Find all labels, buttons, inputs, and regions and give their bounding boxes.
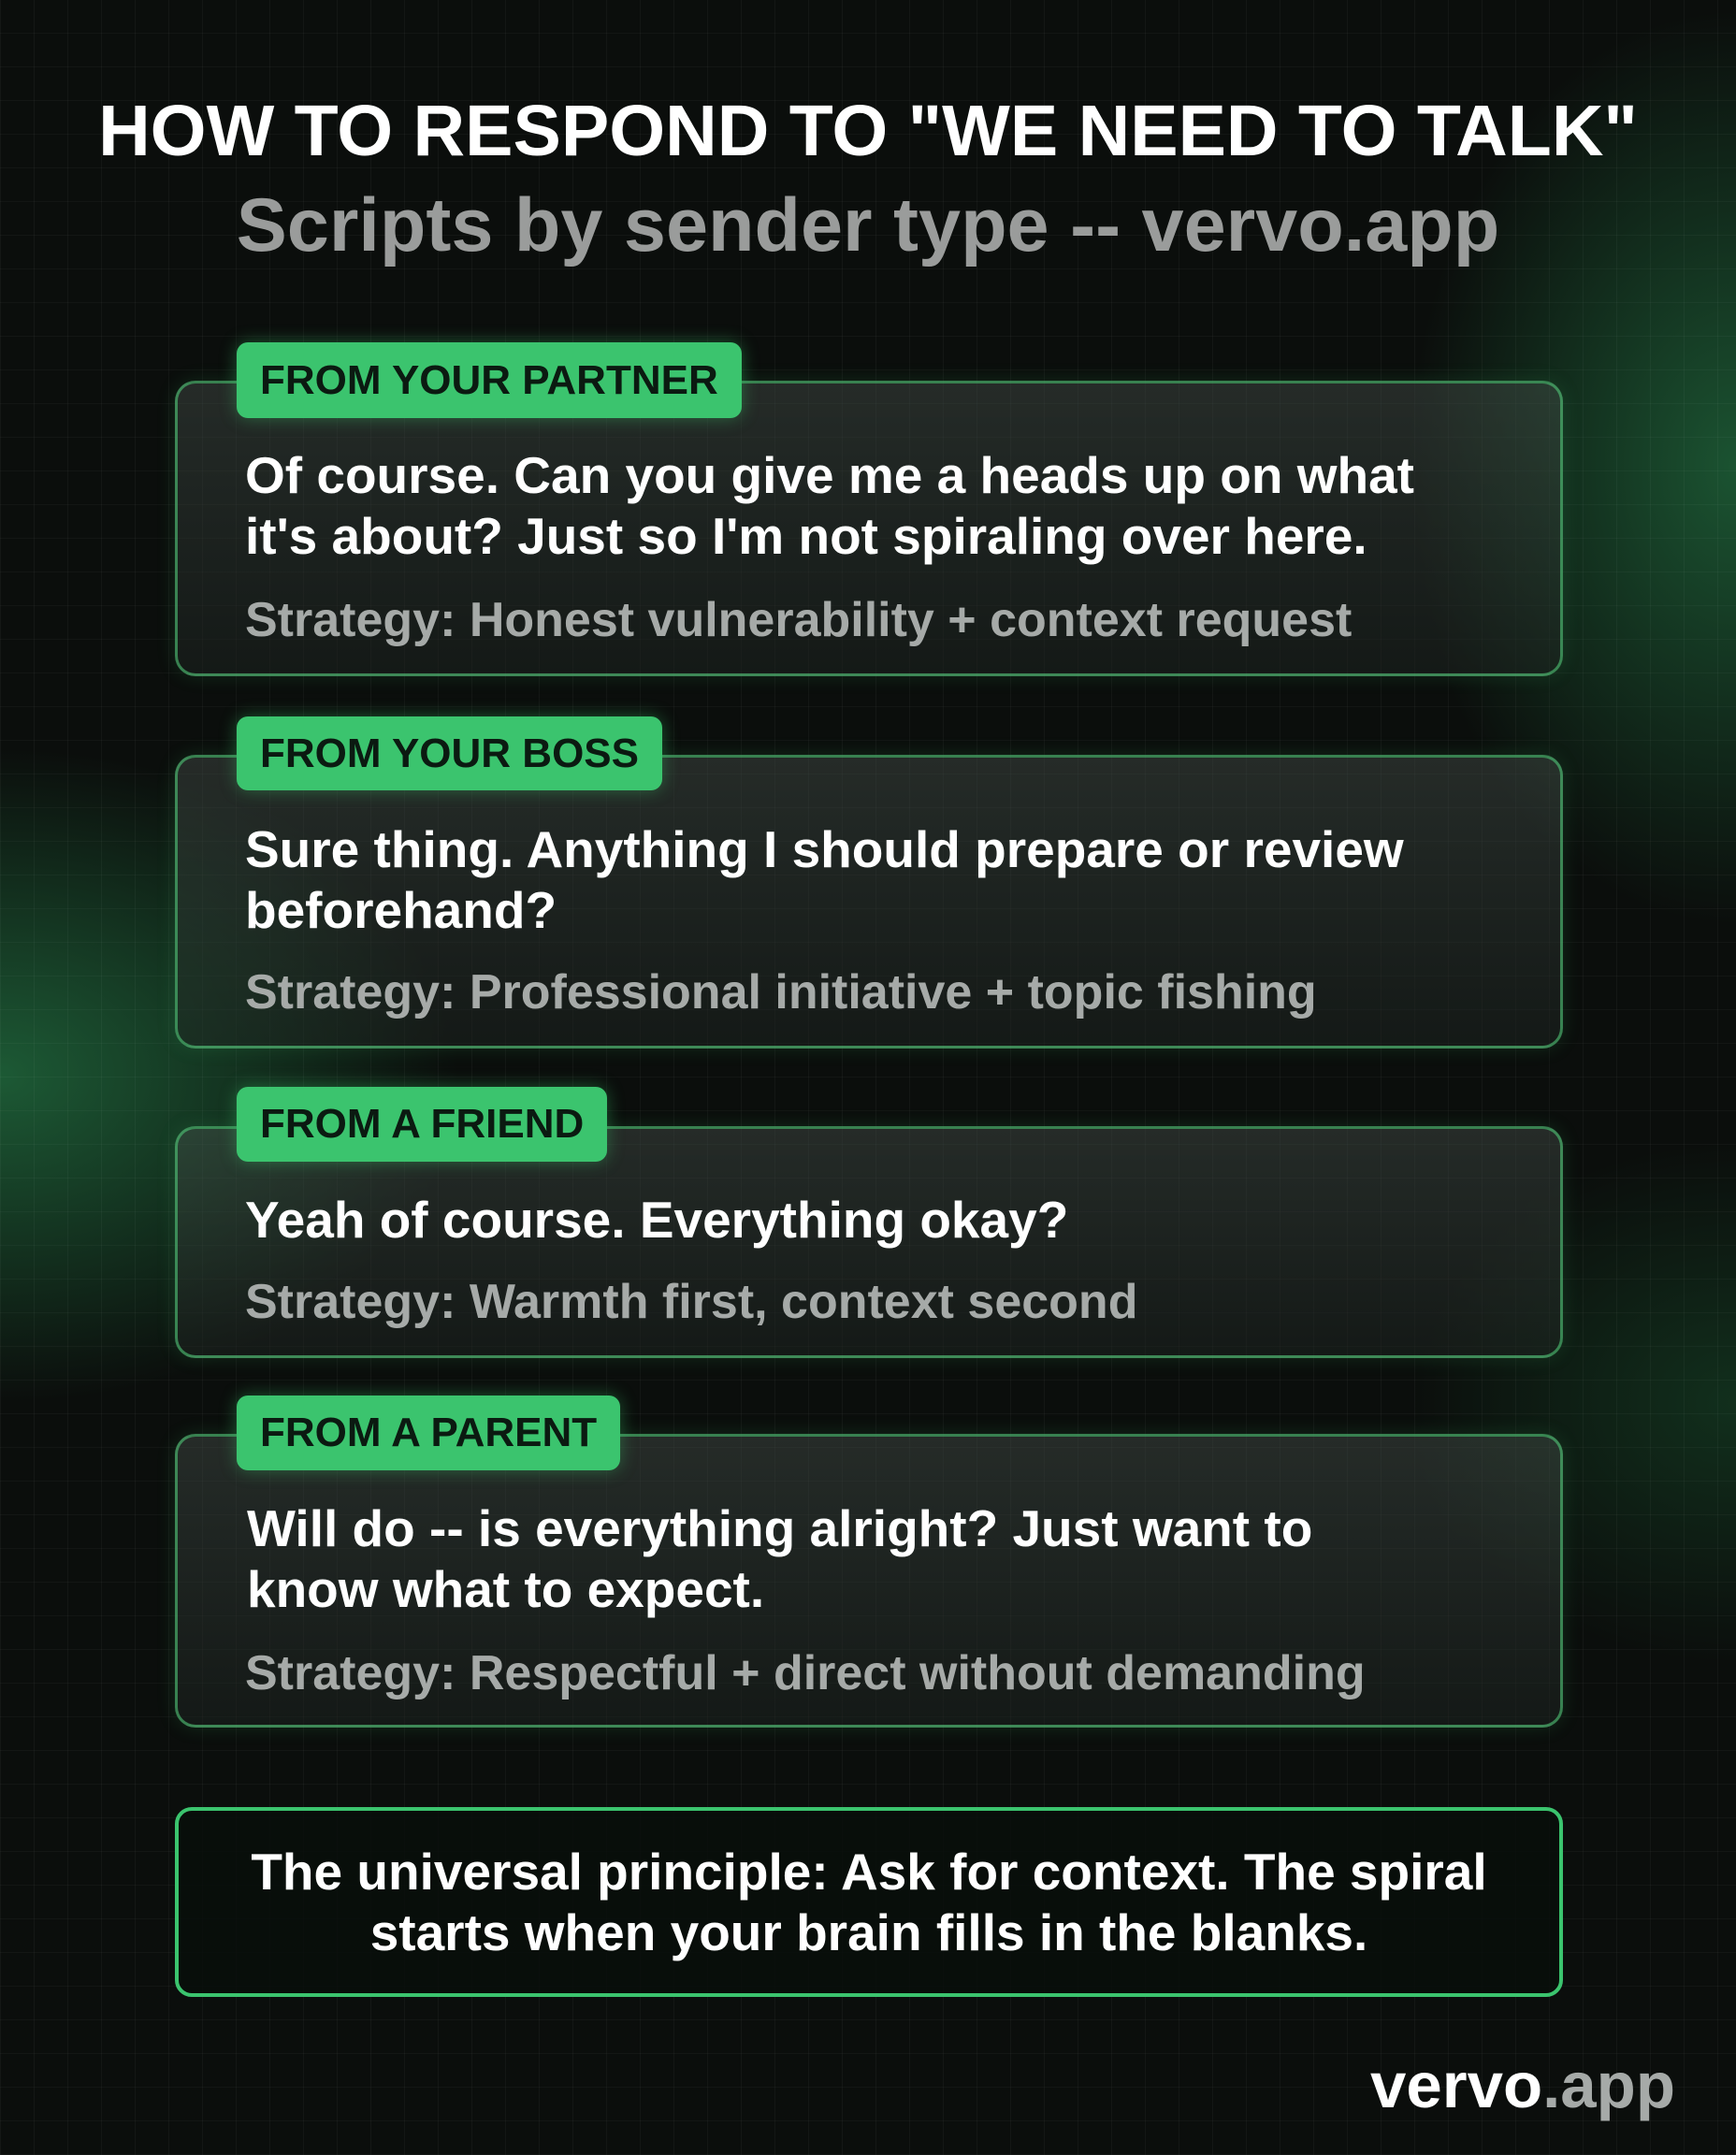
tag: parent [237,1396,620,1470]
footer logo: vervo.app [1370,2049,1675,2121]
callout: universal principle [175,1807,1563,1997]
strategy: parent: Strategy: Respectful + direct without demanding [245,1646,1366,1700]
callout: universal principle: The universal principle: Ask for context. The spiral [251,1843,1487,1901]
script: parent: Will do -- is everything alright? Just want to [247,1499,1312,1557]
script: partner [245,446,1414,565]
tag: friend: FROM A FRIEND [260,1101,584,1147]
tag: parent: FROM A PARENT [260,1410,597,1455]
subtitle: Scripts by sender type -- vervo.app [237,183,1499,268]
tag: boss [237,716,662,790]
script: boss: Sure thing. Anything I should prepare or review [245,820,1404,878]
panel: partner [175,381,1563,676]
script: friend: Yeah of course. Everything okay? [245,1191,1068,1249]
title: HOW TO RESPOND TO "WE NEED TO TALK" [98,91,1638,171]
panel: parent [175,1434,1563,1728]
strategy: boss: Strategy: Professional initiative + topic fishing [245,965,1317,1020]
callout: universal principle: starts when your brain fills in the blanks. [370,1902,1367,1960]
tag: friend [237,1087,607,1162]
script: boss [245,820,1404,939]
tag: partner [237,342,742,418]
script: partner: Of course. Can you give me a heads up on what [245,446,1414,504]
script: parent: know what to expect. [247,1560,764,1618]
strategy: friend: Strategy: Warmth first, context second [245,1275,1137,1329]
tag: boss: FROM YOUR BOSS [260,730,639,776]
strategy: partner: Strategy: Honest vulnerability + context request [245,593,1352,647]
script: boss: beforehand? [245,881,557,939]
panel: boss [175,755,1563,1049]
script: partner: it's about? Just so I'm not spiraling over here. [245,507,1367,565]
panel: friend [175,1126,1563,1358]
tag: partner: FROM YOUR PARTNER [260,357,718,402]
script: parent [247,1499,1312,1618]
